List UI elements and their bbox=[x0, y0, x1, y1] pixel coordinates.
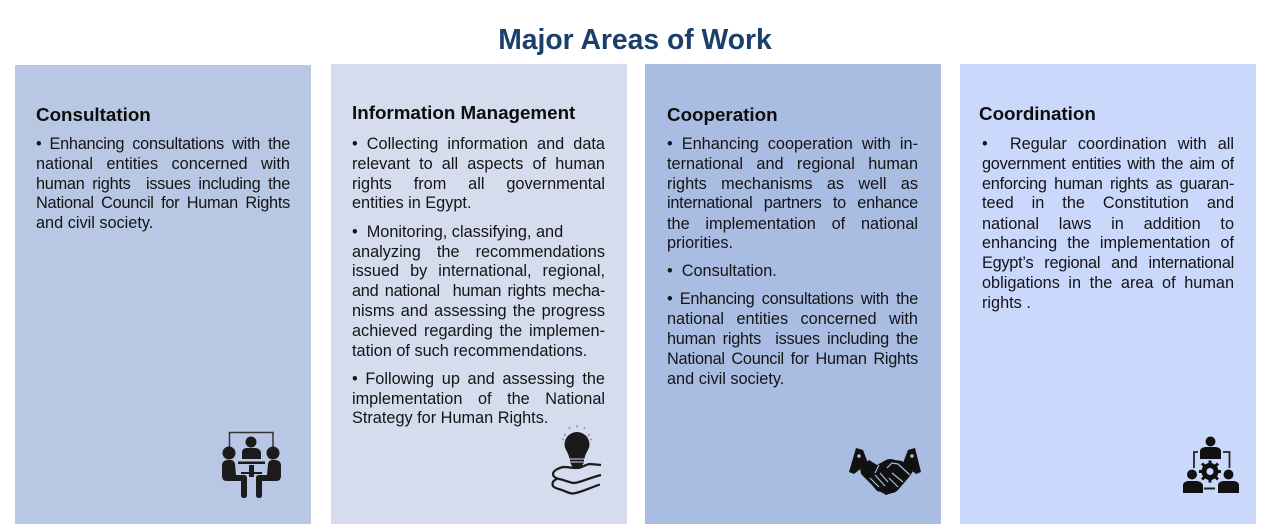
heading: Coordination: Coordination bbox=[979, 103, 1096, 124]
text block: Cooperation bullets: • Enhancing cooperation with in- bbox=[667, 135, 918, 153]
panel: Coordination bbox=[960, 64, 1256, 524]
text block: Information Management bullets: entities in Egypt. bbox=[352, 194, 471, 212]
icon: light bulb and books bbox=[551, 425, 602, 495]
text block: Consultation bullet: National Council for Human Rights bbox=[36, 194, 290, 212]
heading: Consultation: Consultation bbox=[36, 104, 151, 125]
icon: team and gear bbox=[1183, 436, 1239, 493]
text block: Information Management bullets: • Monitoring, classifying, and bbox=[352, 223, 563, 241]
text block: Cooperation bullets: international partners to enhance bbox=[667, 194, 918, 212]
text block: Consultation bullet: human rights issues including the bbox=[36, 175, 290, 193]
text block: Information Management bullets: analyzing the recommendations bbox=[352, 243, 605, 261]
text block: Information Management bullets: nisms and assessing the progress bbox=[352, 302, 605, 320]
text block: Cooperation bullets: ternational and regional human bbox=[667, 155, 918, 173]
text block: Coordination bullet: national laws in addition to bbox=[982, 215, 1234, 233]
text block: Coordination bullet bbox=[982, 135, 1234, 312]
text block: Cooperation bullets: priorities. bbox=[667, 234, 733, 252]
text block: Cooperation bullets: • Consultation. bbox=[667, 262, 777, 280]
text block: Information Management bullets bbox=[352, 135, 605, 427]
text block: Consultation bullet: and civil society. bbox=[36, 214, 153, 232]
text block: Coordination bullet: rights . bbox=[982, 294, 1031, 312]
text block: Coordination bullet: enhancing the implementation of bbox=[982, 234, 1234, 252]
text block: Cooperation bullets: human rights issues including the bbox=[667, 330, 918, 348]
text block: Cooperation bullets: the implementation of national bbox=[667, 215, 918, 233]
icon: handshake bbox=[849, 448, 921, 495]
text block: Coordination bullet: Egypt’s regional and international bbox=[982, 254, 1234, 272]
text block: Coordination bullet: • Regular coordination with all bbox=[982, 135, 1234, 153]
text block: Information Management bullets: rights from all governmental bbox=[352, 175, 605, 193]
text block: Information Management bullets: • Collecting information and data bbox=[352, 135, 605, 153]
panel: Information Management bbox=[331, 64, 627, 524]
text block: Information Management bullets: and national human rights mecha- bbox=[352, 282, 605, 300]
text block: Cooperation bullets: national entities concerned with bbox=[667, 310, 918, 328]
heading: Cooperation: Cooperation bbox=[667, 104, 778, 125]
text block: Consultation bullet bbox=[36, 135, 290, 232]
panel: Consultation bbox=[15, 65, 311, 524]
title: Major Areas of Work bbox=[498, 23, 772, 55]
text block: Consultation bullet: national entities concerned with bbox=[36, 155, 290, 173]
text block: Cooperation bullets: rights mechanisms as well as bbox=[667, 175, 918, 193]
text block: Information Management bullets: Strategy for Human Rights. bbox=[352, 409, 548, 427]
text block: Information Management bullets: tation of such recommendations. bbox=[352, 342, 587, 360]
text block: Cooperation bullets bbox=[667, 135, 918, 388]
text block: Coordination bullet: government entities with the aim of bbox=[982, 155, 1234, 173]
text block: Cooperation bullets: and civil society. bbox=[667, 370, 784, 388]
text block: Coordination bullet: enforcing human rights as guaran- bbox=[982, 175, 1234, 193]
text block: Information Management bullets: issued by international, regional, bbox=[352, 262, 605, 280]
text block: Information Management bullets: implementation of the National bbox=[352, 390, 605, 408]
text block: Cooperation bullets: • Enhancing consultations with the bbox=[667, 290, 918, 308]
text block: Information Management bullets: relevant to all aspects of human bbox=[352, 155, 605, 173]
panel: Cooperation bbox=[645, 64, 941, 524]
text block: Information Management bullets: achieved regarding the implemen- bbox=[352, 322, 605, 340]
text block: Information Management bullets: • Following up and assessing the bbox=[352, 370, 605, 388]
text block: Coordination bullet: obligations in the area of human bbox=[982, 274, 1234, 292]
icon: meeting bbox=[222, 432, 281, 498]
text block: Consultation bullet: • Enhancing consultations with the bbox=[36, 135, 290, 153]
text block: Cooperation bullets: National Council for Human Rights bbox=[667, 350, 918, 368]
text block: Coordination bullet: teed in the Constitution and bbox=[982, 194, 1234, 212]
heading: Information Management: Information Management bbox=[352, 102, 575, 123]
